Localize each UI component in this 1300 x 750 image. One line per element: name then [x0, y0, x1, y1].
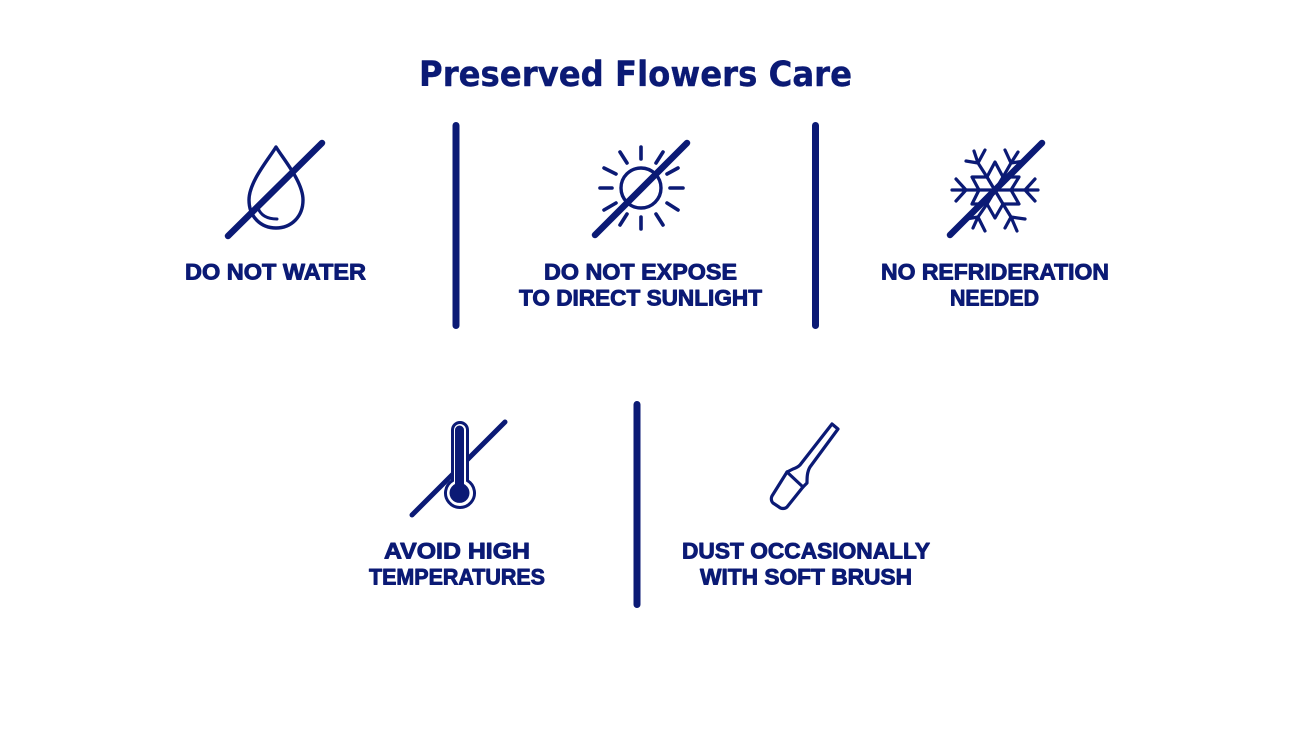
divider 2: [812, 122, 819, 329]
icon: crossed-out thermometer: [412, 422, 505, 515]
label: avoid high temperatures: AVOID HIGH: [384, 538, 530, 564]
panel: dust occasionally: [682, 424, 930, 590]
label: do not expose to direct sunlight: TO DIRECT SUNLIGHT: [519, 286, 763, 310]
label: no refrigeration needed: NO REFRIDERATION: [881, 260, 1109, 284]
panel: no refrigeration: [881, 143, 1109, 310]
icon: crossed-out sun: [595, 143, 687, 235]
label: dust occasionally with soft brush: [682, 538, 930, 590]
icon: soft brush: [771, 424, 838, 508]
divider 1: [452, 122, 460, 329]
panel: do not water: [185, 143, 366, 284]
label: do not expose to direct sunlight: DO NOT EXPOSE: [544, 260, 737, 284]
label: no refrigeration needed: NEEDED: [950, 286, 1039, 310]
label: avoid high temperatures: TEMPERATURES: [369, 564, 545, 590]
divider 3: [634, 401, 640, 608]
title: Preserved Flowers Care: [419, 55, 852, 95]
label: no refrigeration needed: [881, 260, 1109, 310]
label: avoid high temperatures: [369, 538, 545, 590]
label: dust occasionally with soft brush: WITH SOFT BRUSH: [700, 564, 912, 590]
panel: avoid high temperatures: [369, 422, 545, 590]
label: dust occasionally with soft brush: DUST OCCASIONALLY: [682, 538, 930, 564]
label: do not water: DO NOT WATER: [185, 260, 366, 284]
icon: crossed-out snowflake: [950, 143, 1042, 235]
label: do not expose to direct sunlight: [519, 260, 763, 310]
icon: crossed-out water drop: [228, 143, 322, 236]
panel: do not expose to sunlight: [519, 143, 763, 310]
